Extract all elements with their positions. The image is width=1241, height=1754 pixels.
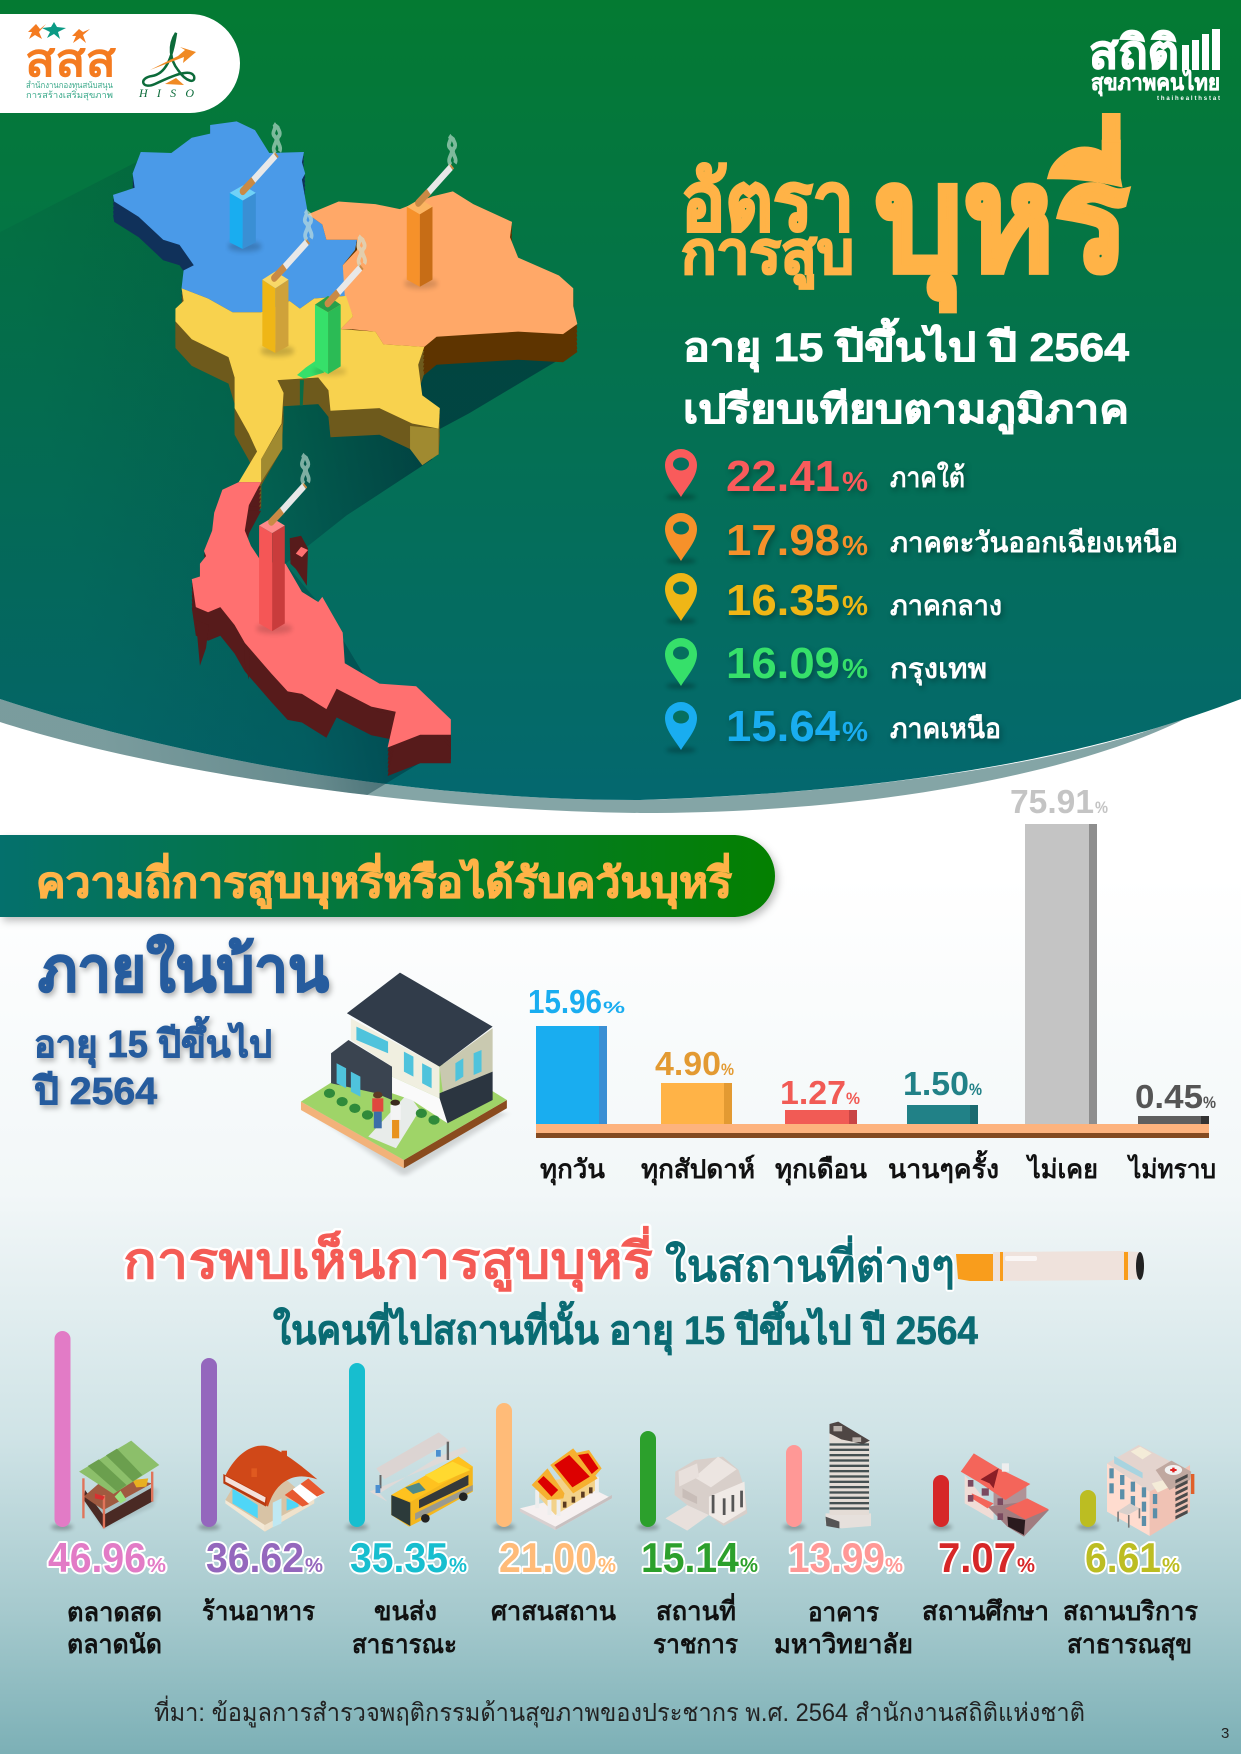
- bar: unknown: [1135, 1078, 1216, 1124]
- row: south: ภาคใต้: [890, 461, 965, 493]
- percentage values for places: 21.00: [499, 1534, 597, 1581]
- bar: never: 75.91: [1010, 783, 1094, 820]
- bar chart: home smoke frequency: [528, 783, 1216, 1186]
- region: north: [113, 121, 357, 312]
- percentage values for places: 6.61: [1085, 1534, 1161, 1581]
- percentage values for places: 46.96: [48, 1534, 146, 1581]
- chart category labels: นานๆครั้ง: [888, 1149, 999, 1184]
- bar: unknown: 0.45: [1135, 1078, 1203, 1115]
- percentage values for places: %: [885, 1555, 903, 1577]
- chart category labels: ทุกเดือน: [775, 1154, 867, 1186]
- percentage values for places: %: [305, 1555, 323, 1577]
- logo: HISO: [138, 33, 196, 100]
- place labels: ตลาดนัด: [67, 1629, 162, 1659]
- chart category labels: [540, 1149, 1216, 1186]
- chart: places where smoking was seen: [51, 1331, 1194, 1537]
- item: school: [930, 1453, 1049, 1537]
- place labels: ศาสนสถาน: [491, 1596, 616, 1626]
- row: north: %: [842, 716, 868, 747]
- item: government office: [637, 1431, 747, 1531]
- percentage values for places: 36.62: [206, 1534, 304, 1581]
- bar: occasionally: [903, 1065, 982, 1124]
- place labels: ราชการ: [653, 1629, 738, 1659]
- row: central: ภาคกลาง: [890, 590, 1002, 621]
- percentage values for places: %: [147, 1555, 166, 1577]
- bar: occasionally: %: [969, 1080, 982, 1099]
- map of Thailand by region: [113, 121, 577, 776]
- region: northeast: [308, 191, 577, 347]
- row: northeast: [665, 513, 1178, 565]
- heading: seeing smoking in places: ในสถานที่ต่างๆ: [665, 1235, 955, 1291]
- logo: สถิติสุขภาพคนไทย: สถิติ: [1089, 26, 1179, 78]
- bar: northeast: [404, 136, 456, 289]
- row: Bangkok: [665, 638, 987, 689]
- row: north: [665, 702, 1001, 753]
- logo: สถิติสุขภาพคนไทย: thaihealthstat: [1157, 96, 1220, 102]
- place labels: สถานที่: [656, 1592, 736, 1626]
- map side extrusion: [113, 126, 577, 776]
- title: smoking rate: [681, 115, 1129, 311]
- logo: ThaiHealth: [25, 22, 117, 101]
- bar: every week: %: [721, 1060, 734, 1079]
- place labels: สาธารณะ: [352, 1629, 457, 1659]
- row: Bangkok: กรุงเทพ: [890, 653, 987, 686]
- row: central: 16.35: [726, 576, 840, 625]
- row: northeast: 17.98: [726, 516, 840, 565]
- heading: inside the home: [32, 934, 329, 1113]
- logo: ThaiHealth: สสส: [25, 34, 117, 86]
- percentage values for places: [48, 1534, 1180, 1581]
- logo: HISO: H I S O: [138, 86, 194, 100]
- place labels: ขนส่ง: [374, 1596, 437, 1626]
- percentage values for places: %: [740, 1555, 758, 1577]
- bar: every week: [655, 1045, 734, 1124]
- bar: every month: %: [846, 1089, 860, 1108]
- subtitle: อายุ 15 ปีขึ้นไป ปี 2564: [683, 318, 1130, 373]
- row: south: 22.41: [726, 452, 840, 501]
- row: northeast: %: [842, 530, 868, 561]
- title: smoking rate: บุหรี่: [875, 115, 1129, 311]
- region: Bangkok: [297, 361, 324, 379]
- heading: seeing smoking in places: การพบเห็นการสูบบุหรี่: [123, 1226, 653, 1292]
- chart category labels: ไม่ทราบ: [1126, 1153, 1216, 1184]
- percentage values for places: %: [1162, 1555, 1180, 1577]
- bar: every day: [528, 983, 625, 1124]
- row: Bangkok: 16.09: [726, 639, 840, 688]
- logo panel: ThaiHealth and HISO: [0, 14, 240, 113]
- bar: every month: 1.27: [780, 1074, 846, 1111]
- place labels: [67, 1592, 1198, 1661]
- row: central: %: [842, 590, 868, 621]
- logo: สถิติสุขภาพคนไทย: สุขภาพคนไทย: [1091, 69, 1220, 97]
- percentage values for places: 35.35: [350, 1534, 448, 1581]
- heading: seeing smoking in places: [123, 1226, 955, 1292]
- bar: never: %: [1095, 798, 1108, 817]
- row: Bangkok: %: [842, 653, 868, 684]
- place labels: อาคาร: [808, 1597, 879, 1627]
- place labels: สาธารณสุข: [1067, 1629, 1192, 1661]
- icon: house: [301, 973, 507, 1177]
- chart category labels: ไม่เคย: [1025, 1153, 1098, 1184]
- bar: Bangkok: [313, 236, 365, 376]
- bar: every month: [780, 1074, 860, 1124]
- regional ranking list: [665, 449, 1178, 753]
- bar: occasionally: 1.50: [903, 1065, 969, 1102]
- bar: every day: %: [603, 998, 625, 1017]
- item: public transport: [346, 1363, 473, 1530]
- title: smoking rate: การสูบ: [681, 221, 854, 289]
- header background: green curved panel: [0, 0, 1241, 813]
- chart baseline: [536, 1124, 1209, 1138]
- subheading: ในคนที่ไปสถานที่นั้น อายุ 15 ปีขึ้นไป ปี 2564: [273, 1301, 979, 1356]
- icon: cigarette: [956, 1251, 1144, 1281]
- logo: ThaiHealth: สำนักงานกองทุนสนับสนุน: [26, 80, 113, 91]
- heading: inside the home: ปี 2564: [32, 1071, 157, 1113]
- region: south: [192, 482, 451, 747]
- logo: ThaiHealth: การสร้างเสริมสุขภาพ: [26, 90, 113, 101]
- item: market: [51, 1331, 159, 1530]
- bar: north: [228, 124, 280, 252]
- subtitle: [683, 318, 1130, 434]
- bar: every week: 4.90: [655, 1045, 721, 1082]
- chart category labels: ทุกสัปดาห์: [641, 1154, 755, 1186]
- title: smoking rate: อัตรา: [681, 157, 854, 248]
- place labels: มหาวิทยาลัย: [774, 1629, 913, 1659]
- percentage values for places: 7.07: [938, 1534, 1016, 1581]
- heading: inside the home: อายุ 15 ปีขึ้นไป: [34, 1016, 272, 1068]
- item: religious place: [493, 1403, 612, 1530]
- place labels: สถานศึกษา: [922, 1596, 1049, 1626]
- chart category labels: ทุกวัน: [540, 1154, 605, 1186]
- bar: never: [1010, 783, 1108, 1124]
- region: central: [175, 288, 440, 482]
- percentage values for places: %: [598, 1555, 616, 1577]
- item: restaurant: [198, 1358, 325, 1532]
- bar: unknown: %: [1203, 1093, 1216, 1112]
- subtitle: เปรียบเทียบตามภูมิภาค: [683, 388, 1129, 434]
- bar: south: [256, 455, 309, 634]
- item: tower: [783, 1422, 871, 1530]
- section banner: smoke frequency: ความถี่การสูบบุหรี่หรือได้รับควันบุหรี่: [36, 853, 732, 909]
- percentage values for places: 15.14: [641, 1534, 740, 1581]
- place labels: ร้านอาหาร: [202, 1596, 315, 1626]
- row: northeast: ภาคตะวันออกเฉียงเหนือ: [890, 527, 1178, 558]
- bar: every day: 15.96: [528, 983, 602, 1020]
- row: south: [665, 449, 965, 501]
- heading: inside the home: ภายในบ้าน: [38, 934, 329, 1005]
- row: north: 15.64: [726, 702, 841, 751]
- row: central: [665, 573, 1002, 625]
- map long shadow: [0, 161, 559, 800]
- section banner: smoke frequency: [0, 835, 775, 917]
- bar: central: [260, 211, 312, 356]
- percentage values for places: 13.99: [788, 1534, 885, 1581]
- source note: ที่มา: ข้อมูลการสำรวจพฤติกรรมด้านสุขภาพของประชากร พ.ศ. 2564 สำนักงานสถิติแห่งชาติ: [154, 1695, 1085, 1728]
- percentage values for places: %: [1017, 1555, 1035, 1577]
- place labels: ตลาดสด: [67, 1597, 162, 1627]
- item: health service: [1077, 1445, 1194, 1536]
- row: north: ภาคเหนือ: [890, 713, 1001, 744]
- logo: สถิติสุขภาพคนไทย: [1089, 26, 1220, 102]
- percentage values for places: %: [449, 1555, 467, 1577]
- place labels: สถานบริการ: [1063, 1596, 1198, 1626]
- row: south: %: [842, 466, 868, 497]
- page number: 3: [1221, 1725, 1229, 1742]
